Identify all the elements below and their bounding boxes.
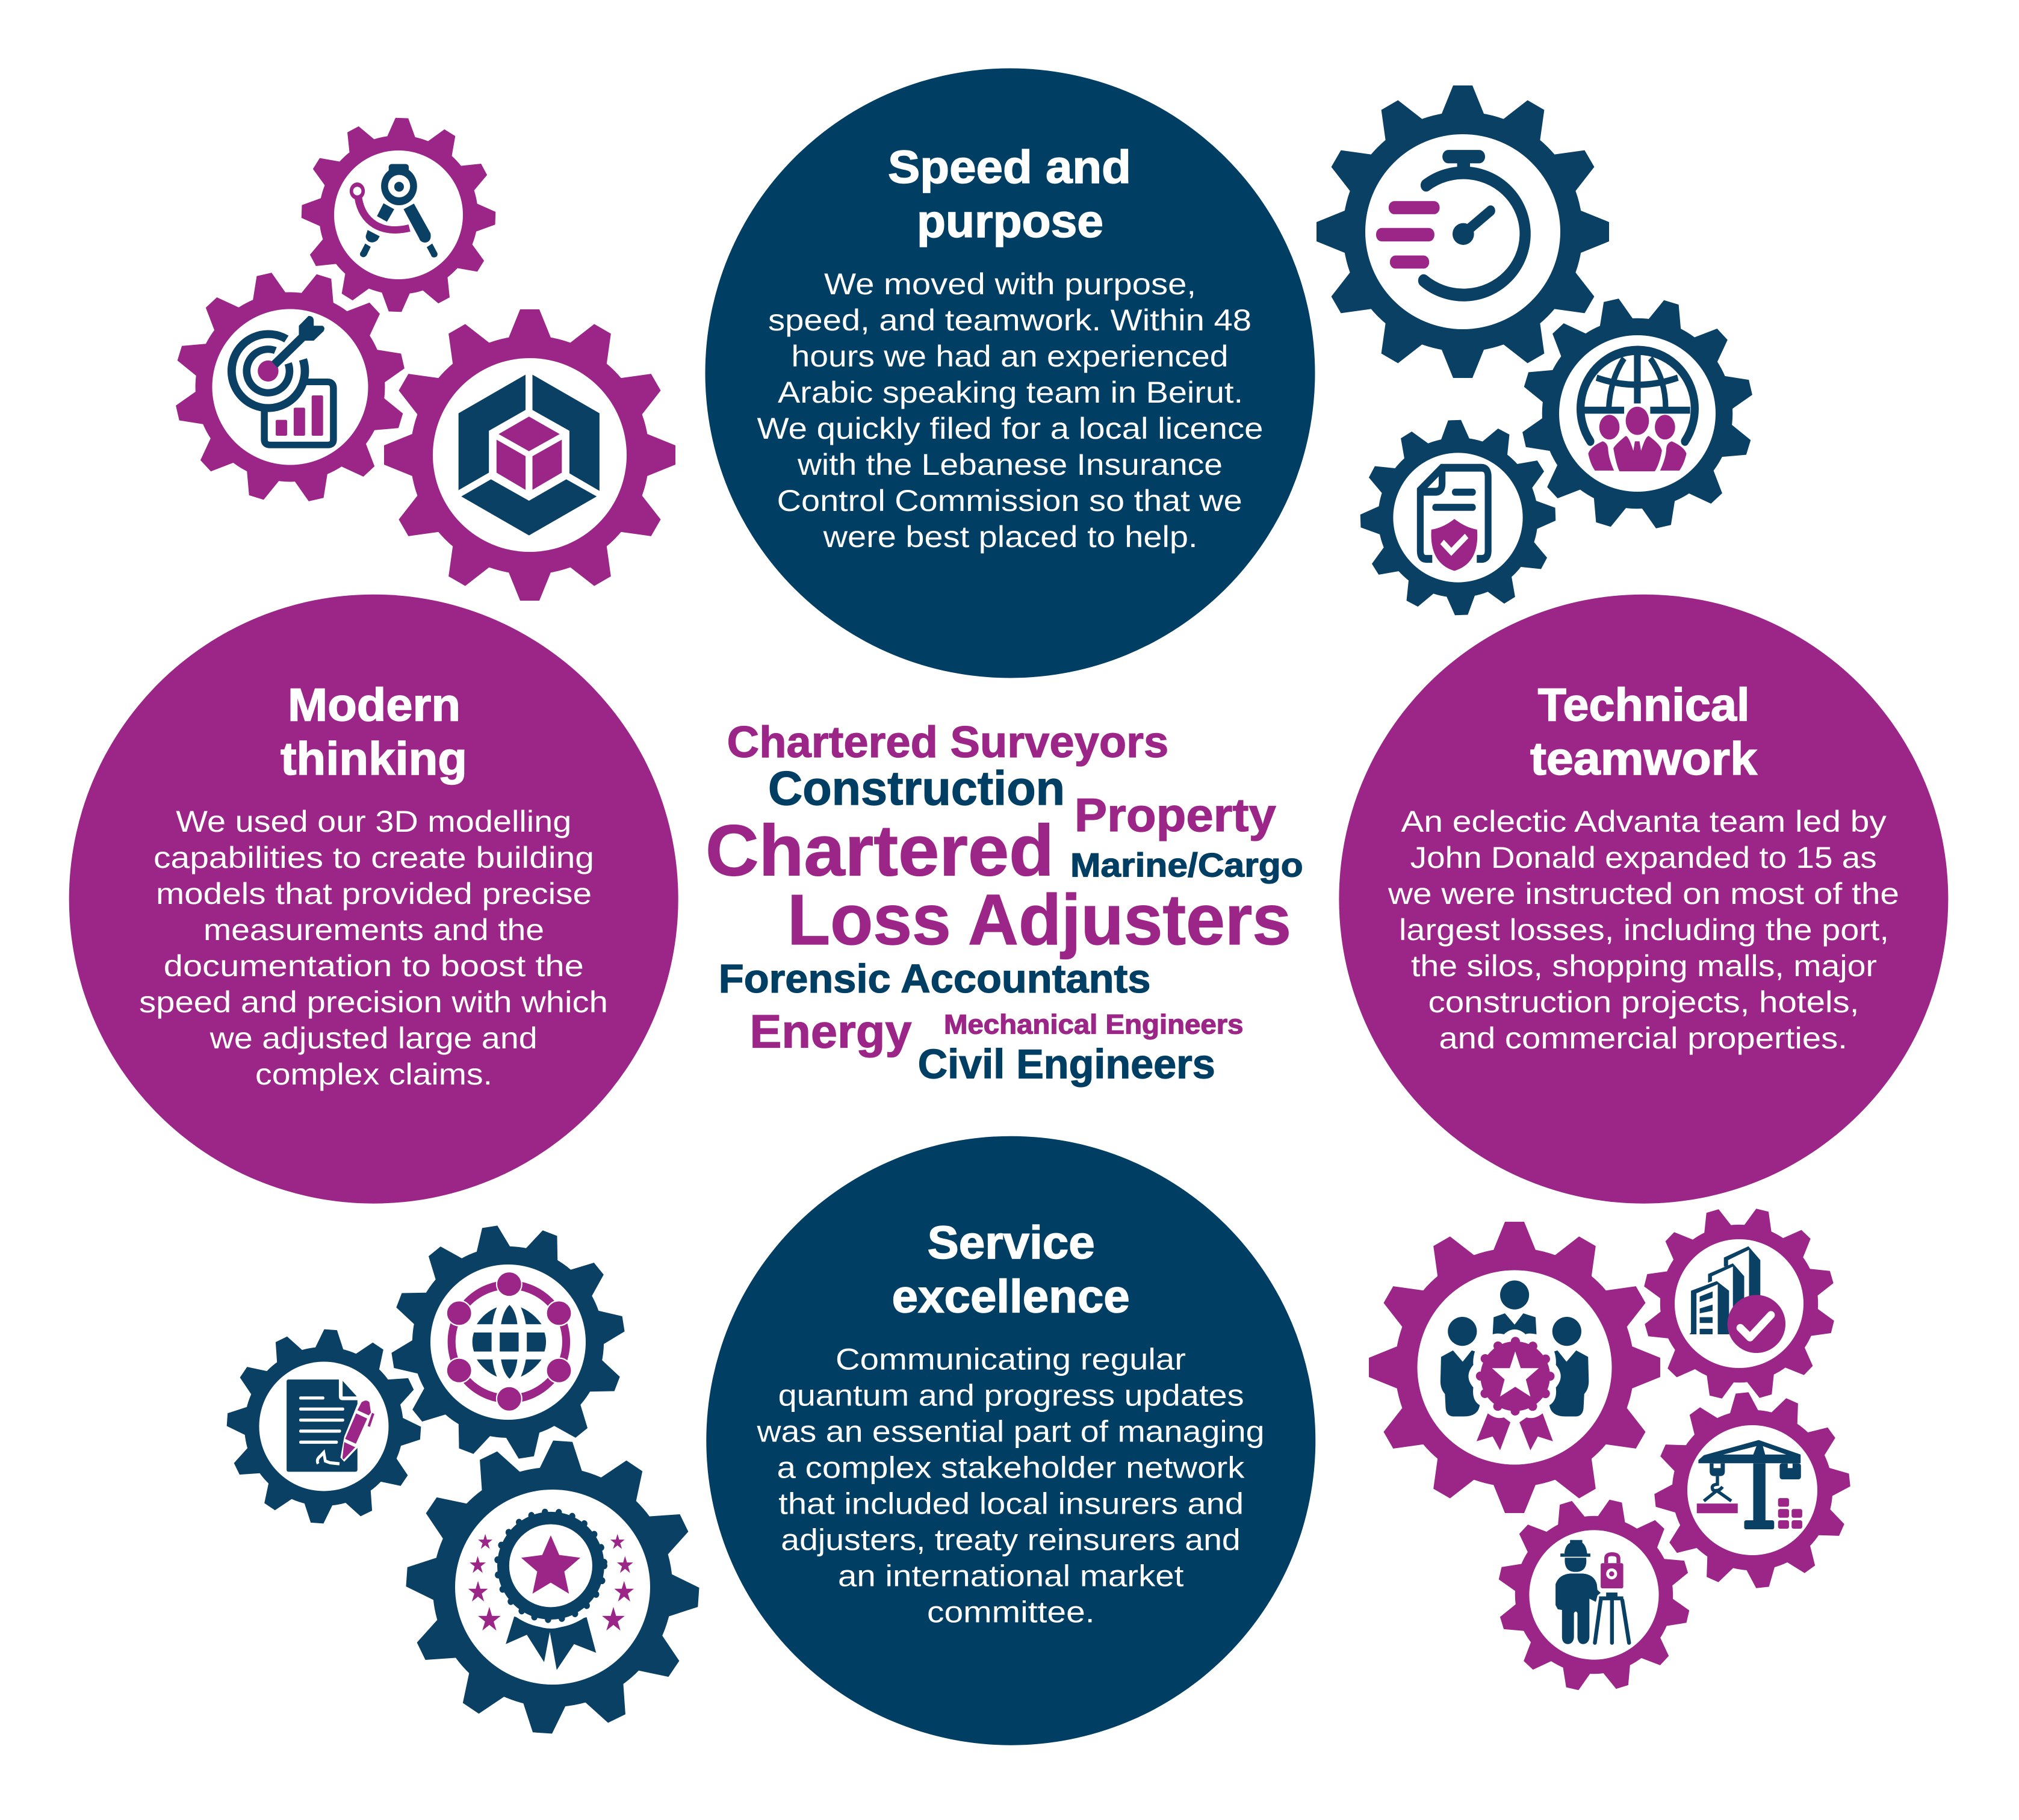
text block: speed and purpose body (757, 267, 1263, 554)
heading: technical teamwork (1530, 679, 1757, 785)
word: Property: Property (1075, 788, 1276, 841)
text block: modern thinking body: capabilities to create building (154, 841, 594, 874)
text block: technical teamwork body: and commercial properties. (1439, 1021, 1847, 1055)
text block: speed and purpose body: hours we had an experienced (791, 339, 1228, 373)
icon: drafting compass (350, 164, 438, 258)
text block: service excellence body: that included local insurers and (778, 1487, 1244, 1520)
text block: modern thinking body: models that provided precise (156, 877, 592, 911)
icon: stopwatch (1376, 150, 1525, 295)
icon: 3D cube (459, 374, 600, 536)
heading: speed and purpose (888, 141, 1131, 247)
text block: modern thinking body: We used our 3D modelling (176, 805, 571, 838)
gear: 3D cube (384, 309, 675, 601)
heading: technical teamwork: Technical (1538, 679, 1750, 731)
text block: service excellence body: Communicating regular (836, 1342, 1186, 1376)
text block: service excellence body: quantum and progress updates (778, 1378, 1244, 1412)
icon: signed document (287, 1379, 373, 1472)
heading: modern thinking (281, 679, 467, 785)
text block: technical teamwork body: John Donald expanded to 15 as (1410, 841, 1877, 874)
word: Mechanical Engineers: Mechanical Engineers (944, 1009, 1244, 1040)
text block: speed and purpose body: were best placed to help. (822, 520, 1198, 554)
word: Chartered: Chartered (706, 810, 1054, 891)
panel: service excellence (706, 1136, 1315, 1745)
word: Civil Engineers: Civil Engineers (918, 1041, 1215, 1087)
text block: speed and purpose body: We moved with purpose, (824, 267, 1196, 301)
text block: modern thinking body: complex claims. (255, 1057, 492, 1091)
word: Forensic Accountants: Forensic Accountants (719, 956, 1151, 1001)
heading: technical teamwork: teamwork (1530, 733, 1757, 785)
heading: service excellence (892, 1217, 1130, 1323)
text block: service excellence body: an international market (838, 1559, 1184, 1592)
gear: surveyor (1478, 1479, 1710, 1710)
heading: service excellence: Service (928, 1217, 1095, 1269)
gear: globe and people (1492, 268, 1782, 559)
heading: speed and purpose: Speed and (888, 141, 1131, 193)
icon: document with shield (1420, 468, 1488, 571)
text block: speed and purpose body: speed, and teamwork. Within 48 (768, 303, 1251, 337)
word: Chartered Surveyors: Chartered Surveyors (727, 718, 1168, 767)
gear: target and chart (146, 243, 435, 531)
text block: service excellence body: a complex stakeholder network (777, 1450, 1245, 1484)
text block: technical teamwork body (1388, 805, 1899, 1055)
text block: modern thinking body: measurements and the (203, 913, 544, 947)
panel: speed and purpose (706, 69, 1315, 678)
panel: modern thinking (69, 595, 678, 1204)
gear: tower crane (1645, 1382, 1860, 1598)
text block: speed and purpose body: with the Lebanese Insurance (797, 448, 1223, 481)
word: Marine/Cargo: Marine/Cargo (1070, 846, 1303, 884)
heading: modern thinking: Modern (288, 679, 461, 731)
icon: globe and people (1581, 350, 1695, 471)
gear: buildings with check (1622, 1187, 1856, 1420)
word: Energy: Energy (750, 1005, 911, 1058)
icon: surveyor (1555, 1540, 1629, 1644)
panel: technical teamwork (1339, 595, 1948, 1204)
icon: award rosette (468, 1506, 634, 1670)
gear: drafting compass (298, 114, 499, 315)
text block: speed and purpose body: Arabic speaking team in Beirut. (778, 376, 1243, 409)
gear: signed document (220, 1323, 427, 1530)
icon: tower crane (1697, 1440, 1802, 1529)
gear: document with shield (1357, 416, 1559, 619)
text block: modern thinking body: documentation to boost the (164, 949, 584, 983)
icon: team and award (1441, 1280, 1589, 1450)
text block: service excellence body: adjusters, treaty reinsurers and (781, 1523, 1241, 1556)
icon: buildings with check (1689, 1246, 1785, 1353)
word cloud (706, 718, 1303, 1087)
text block: modern thinking body (139, 805, 608, 1091)
gear: award rosette (397, 1431, 709, 1743)
text block: service excellence body: committee. (927, 1595, 1095, 1629)
gear: stopwatch (1317, 85, 1609, 378)
gear: team and award (1369, 1222, 1660, 1513)
heading: modern thinking: thinking (281, 733, 467, 785)
text block: technical teamwork body: the silos, shopping malls, major (1411, 949, 1877, 983)
text block: technical teamwork body: construction projects, hotels, (1428, 985, 1859, 1019)
text block: service excellence body (756, 1342, 1264, 1629)
icon: network globe (447, 1272, 571, 1411)
text block: speed and purpose body: We quickly filed for a local licence (757, 412, 1263, 445)
text block: technical teamwork body: largest losses, including the port, (1399, 913, 1889, 947)
heading: service excellence: excellence (892, 1271, 1130, 1323)
word: Loss Adjusters: Loss Adjusters (787, 880, 1291, 960)
word: Construction: Construction (768, 761, 1065, 815)
text block: modern thinking body: we adjusted large and (209, 1021, 538, 1055)
text block: service excellence body: was an essential part of managing (756, 1414, 1264, 1448)
heading: speed and purpose: purpose (917, 196, 1103, 247)
text block: speed and purpose body: Control Commission so that we (777, 484, 1242, 518)
text block: technical teamwork body: we were instructed on most of the (1388, 877, 1899, 911)
icon: target and chart (232, 316, 333, 445)
text block: technical teamwork body: An eclectic Advanta team led by (1401, 805, 1887, 838)
text block: modern thinking body: speed and precision with which (139, 985, 608, 1019)
gear: network globe (357, 1191, 659, 1493)
